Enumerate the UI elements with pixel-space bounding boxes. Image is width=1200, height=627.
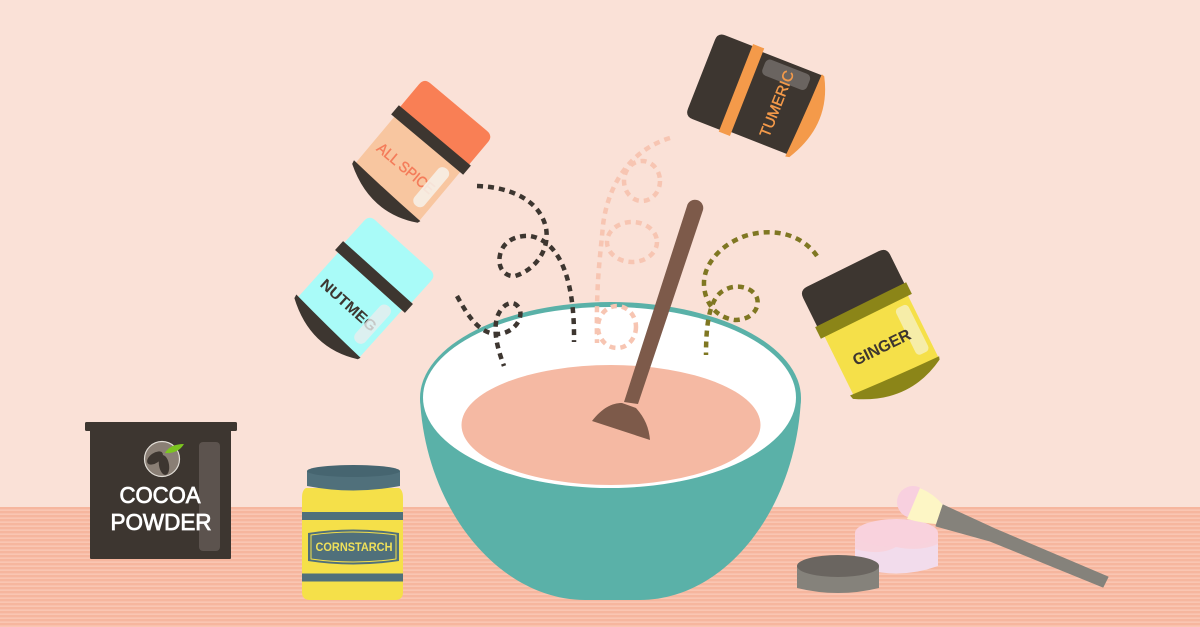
lid: dark compact lid (797, 555, 879, 593)
jar: ginger (797, 246, 949, 414)
icon: cocoa beans logo (144, 442, 184, 476)
label: all spice: ALL SPICE (373, 140, 438, 198)
label: tumeric: TUMERIC (757, 68, 798, 140)
cocoa powder box: POWDER (110, 509, 212, 535)
makeup brush (897, 486, 1108, 587)
label: cornstarch: CORNSTARCH (316, 540, 392, 554)
powder jar (855, 519, 938, 574)
table surface (0, 507, 1200, 627)
batter (462, 365, 760, 485)
dashed trail: black (457, 186, 574, 366)
label: nutmeg: NUTMEG (317, 276, 380, 335)
spoon (592, 200, 703, 440)
cornstarch jar (302, 465, 403, 600)
dashed trail: peach (597, 138, 670, 348)
jar: all spice (341, 77, 495, 234)
dashed trail: olive (704, 232, 817, 355)
label: ginger: GINGER (850, 326, 914, 370)
jar: tumeric (684, 31, 836, 164)
label: cocoa powder: COCOA (120, 482, 201, 508)
jar: nutmeg (283, 214, 438, 370)
bowl (420, 302, 801, 600)
cocoa powder box (85, 422, 237, 559)
